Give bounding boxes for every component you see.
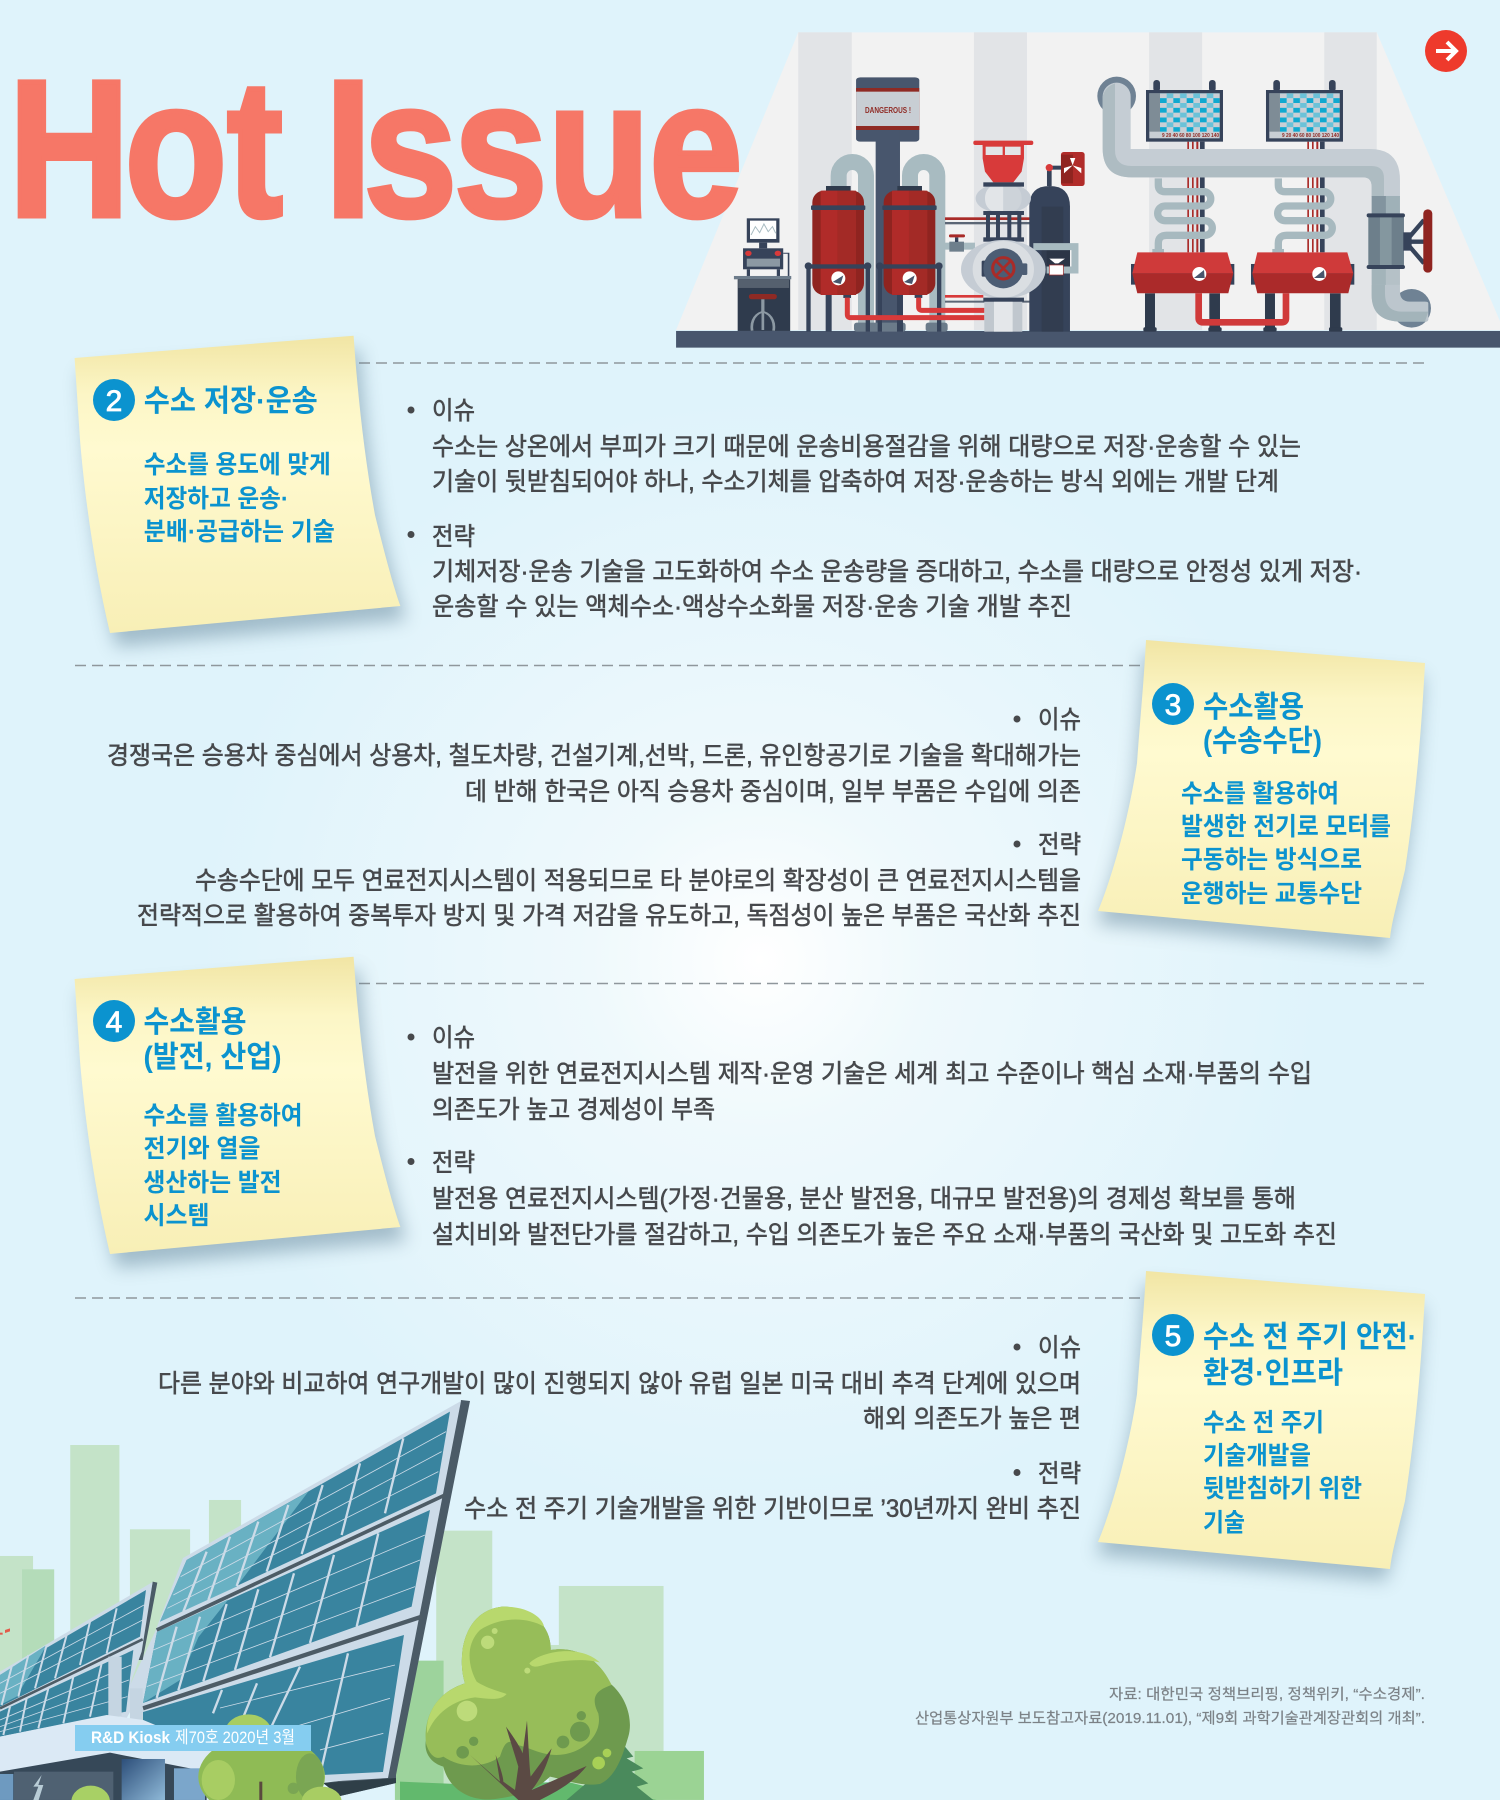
text block: section 4 issue and strategy: 발전을 위한 연료전지시스템 제작·운영 기술은 세계 최고 수준이나 핵심 소재·부품의 수입 <box>432 1060 1312 1088</box>
note 5 description: 뒷받침하기 위한 <box>1203 1475 1362 1503</box>
text block: section 5 issue and strategy: 이슈 <box>1038 1334 1081 1362</box>
note 5 description <box>1203 1409 1362 1537</box>
number badge 4 <box>93 1000 135 1042</box>
note 4 description: 시스템 <box>144 1202 210 1230</box>
text block: section 2 issue and strategy: 전략 <box>432 523 475 551</box>
text block: section 5 issue and strategy: 다른 분야와 비교하여 연구개발이 많이 진행되지 않아 유럽 일본 미국 대비 추격 단계에 있으며 <box>158 1370 1081 1398</box>
note 5 description: 기술 <box>1203 1509 1245 1537</box>
text block: section 5 issue and strategy: 수소 전 주기 기술개발을 위한 기반이므로 ’30년까지 완비 추진 <box>464 1495 1081 1523</box>
text block: section 3 issue and strategy <box>107 706 1081 930</box>
note 3 heading: (수송수단) <box>1203 725 1322 758</box>
label: monitor scale right: 9 20 40 60 80 100 120 140 <box>1282 133 1339 139</box>
text block: section 5 issue and strategy: 해외 의존도가 높은 편 <box>863 1405 1081 1433</box>
note 4 description: 전기와 열을 <box>144 1135 260 1163</box>
number badge 3 <box>1152 683 1194 725</box>
note 3 heading: 수소활용 <box>1203 691 1304 724</box>
text block: section 2 issue and strategy: 기술이 뒷받침되어야 하나, 수소기체를 압축하여 저장·운송하는 방식 외에는 개발 단계 <box>432 468 1279 496</box>
note 5 heading <box>1203 1321 1417 1390</box>
text block: section 4 issue and strategy: 의존도가 높고 경제성이 부족 <box>432 1096 715 1124</box>
number badge 2 <box>93 379 135 421</box>
note 2 description: 분배·공급하는 기술 <box>144 518 335 546</box>
note 3 description <box>1181 780 1391 908</box>
text block: section 4 issue and strategy: 전략 <box>432 1149 475 1177</box>
text block: section 4 issue and strategy <box>408 1024 1337 1249</box>
text block: section 5 issue and strategy <box>158 1334 1081 1523</box>
text block: section 2 issue and strategy: 운송할 수 있는 액체수소·액상수소화물 저장·운송 기술 개발 추진 <box>432 593 1072 621</box>
illustration: factory machinery <box>676 32 1500 348</box>
text block: section 2 issue and strategy <box>408 397 1362 621</box>
text block: section 3 issue and strategy: 데 반해 한국은 아직 승용차 중심이며, 일부 부품은 수입에 의존 <box>465 778 1081 806</box>
issue label: R&D Kiosk <box>91 1728 170 1747</box>
note 5 description: 기술개발을 <box>1203 1442 1311 1470</box>
panel: note 4 hydrogen use in power and industry <box>75 957 406 1268</box>
text block: section 3 issue and strategy: 이슈 <box>1038 706 1081 734</box>
number badge 4: 4 <box>106 1006 122 1039</box>
note 3 heading <box>1203 691 1322 758</box>
arrow button <box>1425 30 1467 72</box>
note 4 description <box>144 1102 302 1230</box>
note 5 heading: 환경·인프라 <box>1203 1357 1343 1390</box>
note 3 description: 구동하는 방식으로 <box>1181 846 1362 874</box>
number badge 5 <box>1152 1314 1194 1356</box>
note 2 description <box>144 451 335 546</box>
issue label: 제70호 2020년 3월 <box>175 1728 295 1747</box>
note 5 heading: 수소 전 주기 안전· <box>1203 1321 1417 1354</box>
text block: section 2 issue and strategy: 이슈 <box>432 397 475 425</box>
note 4 heading: (발전, 산업) <box>144 1041 282 1074</box>
label: dangerous tank: DANGEROUS ! <box>865 106 911 115</box>
panel: note 3 hydrogen use in transport <box>1096 640 1425 950</box>
source credits: 자료: 대한민국 정책브리핑, 정책위키, “수소경제”. <box>1109 1686 1425 1703</box>
note 4 description: 수소를 활용하여 <box>144 1102 302 1130</box>
source credits <box>915 1686 1425 1727</box>
label: monitor scale left: 9 20 40 60 80 100 120 140 <box>1162 133 1219 139</box>
text block: section 4 issue and strategy: 이슈 <box>432 1024 475 1052</box>
note 4 heading <box>144 1006 282 1074</box>
text block: section 3 issue and strategy: 경쟁국은 승용차 중심에서 상용차, 철도차량, 건설기계,선박, 드론, 유인항공기로 기술을 확대해가는 <box>107 742 1081 770</box>
note 3 description: 수소를 활용하여 <box>1181 780 1339 808</box>
illustration: solar panels and trees <box>0 1400 704 1800</box>
text block: section 3 issue and strategy: 전략 <box>1038 831 1081 859</box>
number badge 5: 5 <box>1165 1320 1181 1353</box>
text block: section 3 issue and strategy: 전략적으로 활용하여 중복투자 방지 및 가격 저감을 유도하고, 독점성이 높은 부품은 국산화 추진 <box>137 902 1081 930</box>
note 2 heading: 수소 저장·운송 <box>144 385 318 418</box>
title: Hot Issue <box>9 39 743 258</box>
source credits: 산업통상자원부 보도참고자료(2019.11.01), “제9회 과학기술관계장관회의 개최”. <box>915 1710 1425 1727</box>
note 3 description: 발생한 전기로 모터를 <box>1181 813 1391 841</box>
note 4 description: 생산하는 발전 <box>144 1169 282 1197</box>
note 5 description: 수소 전 주기 <box>1203 1409 1324 1437</box>
text block: section 2 issue and strategy: 수소는 상온에서 부피가 크기 때문에 운송비용절감을 위해 대량으로 저장·운송할 수 있는 <box>432 433 1301 461</box>
number badge 3: 3 <box>1165 689 1181 722</box>
text block: section 2 issue and strategy: 기체저장·운송 기술을 고도화하여 수소 운송량을 증대하고, 수소를 대량으로 안정성 있게 저장· <box>432 558 1362 586</box>
text block: section 4 issue and strategy: 발전용 연료전지시스템(가정·건물용, 분산 발전용, 대규모 발전용)의 경제성 확보를 통해 <box>432 1185 1296 1213</box>
panel: note 2 hydrogen storage <box>75 336 406 647</box>
issue label <box>75 1725 311 1751</box>
text block: section 3 issue and strategy: 수송수단에 모두 연료전지시스템이 적용되므로 타 분야로의 확장성이 큰 연료전지시스템을 <box>195 867 1081 895</box>
text block: section 4 issue and strategy: 설치비와 발전단가를 절감하고, 수입 의존도가 높은 주요 소재·부품의 국산화 및 고도화 추진 <box>432 1221 1337 1249</box>
note 4 heading: 수소활용 <box>144 1006 246 1039</box>
panel: note 5 full-cycle safety and infrastructure <box>1096 1271 1425 1581</box>
number badge 2: 2 <box>106 385 122 418</box>
note 2 description: 저장하고 운송· <box>144 485 289 513</box>
note 2 description: 수소를 용도에 맞게 <box>144 451 331 479</box>
text block: section 5 issue and strategy: 전략 <box>1038 1460 1081 1488</box>
note 3 description: 운행하는 교통수단 <box>1181 880 1362 908</box>
